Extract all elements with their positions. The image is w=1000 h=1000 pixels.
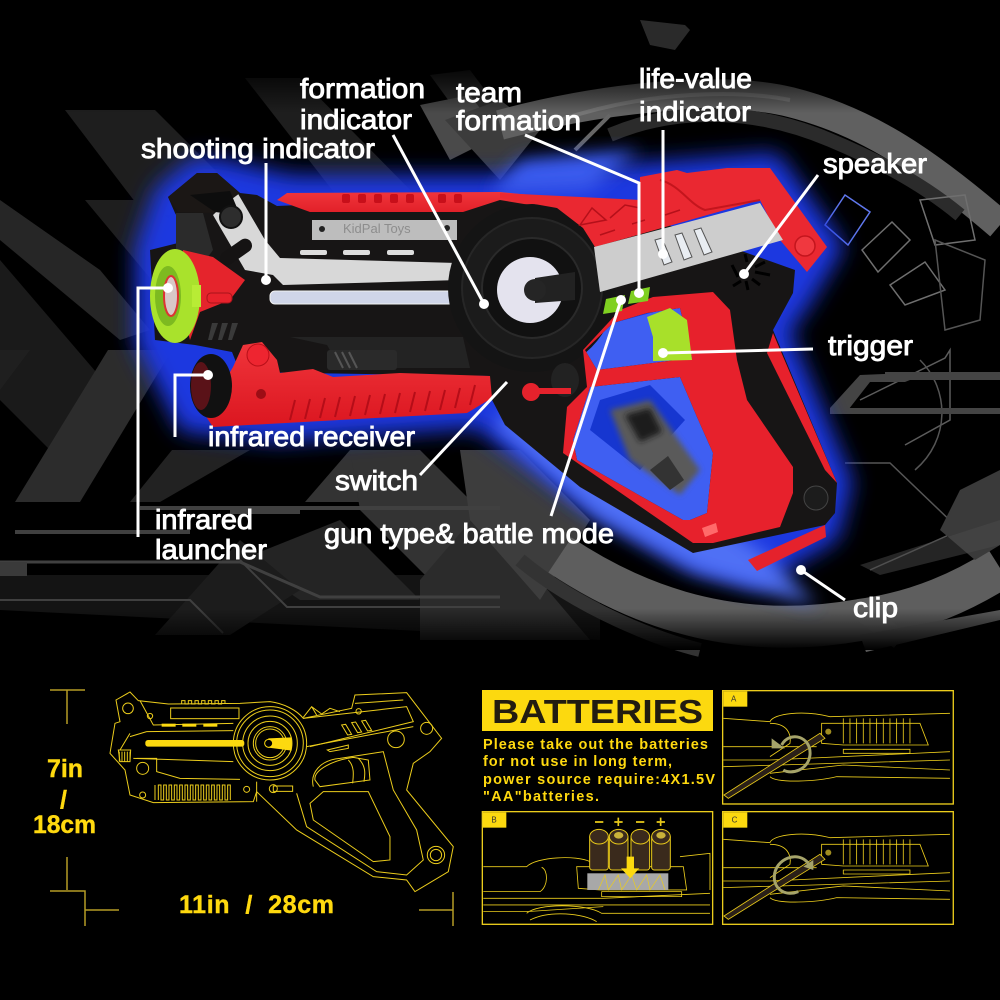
muzzle: [150, 249, 245, 343]
nameplate: [312, 220, 457, 240]
panel B: [482, 812, 713, 924]
red top rail: [277, 192, 590, 222]
width label: 11in / 28cm: [179, 891, 334, 919]
batteries instructions: "AA"batteries.: [483, 789, 599, 805]
height label: /: [60, 786, 67, 814]
green indicators: [603, 287, 650, 314]
dimension drawing: yellow gun outline: [110, 692, 453, 892]
laser gun product: [150, 168, 837, 571]
panel C: C: [732, 816, 738, 825]
infrared receiver barrel: [190, 342, 492, 427]
turret ring: [448, 204, 616, 372]
label: switch: switch: [335, 465, 418, 496]
light bar: [270, 291, 477, 304]
silver rear panel: [594, 203, 783, 292]
batteries heading: BATTERIES: [492, 693, 703, 730]
circuit lines: [0, 508, 500, 633]
batteries instructions: for not use in long term,: [483, 754, 672, 770]
vents: [208, 323, 238, 340]
leader lines: [138, 130, 845, 600]
panel B: B: [491, 816, 497, 825]
label: infrared receiver: infrared receiver: [208, 421, 415, 452]
left chevrons: [0, 78, 600, 640]
clip: [748, 525, 826, 571]
blue glow behind gun: [150, 150, 837, 590]
label: formation indicator: formation: [300, 73, 425, 104]
panel A: A: [731, 695, 737, 704]
centre triangles: [155, 450, 590, 640]
gun body silhouette: [150, 173, 837, 553]
label: team formation: team: [456, 77, 522, 108]
label: gun type and battle mode: gun type& battle mode: [324, 518, 614, 549]
label: formation indicator: indicator: [300, 104, 412, 135]
panel C: [723, 812, 953, 924]
background: tech chevrons and rings: [0, 20, 1000, 652]
dimension lines: [50, 690, 453, 926]
light blue inside trigger guard: [585, 305, 695, 372]
label: team formation: formation: [456, 105, 581, 136]
grip screw: [804, 486, 828, 510]
mode lever: [522, 363, 579, 401]
large ring arcs: [500, 94, 1000, 650]
red rear strip: [767, 333, 837, 483]
sight: [168, 173, 255, 268]
label: life-value indicator: indicator: [639, 96, 751, 127]
height label: 18cm: [33, 811, 96, 839]
right wireframe: [825, 195, 985, 570]
label: clip: clip: [853, 592, 898, 623]
label: shooting indicator: shooting indicator: [141, 133, 375, 164]
upper mosaic: [420, 20, 690, 180]
label: infrared launcher: infrared: [155, 504, 253, 535]
trigger: [647, 308, 692, 361]
batteries instructions: power source require:4X1.5V: [483, 772, 715, 788]
batteries instructions: Please take out the batteries: [483, 737, 708, 753]
speaker grille: [732, 254, 770, 290]
red upper band and rear block: [500, 168, 827, 272]
panel A: [723, 691, 953, 804]
slider: [290, 337, 470, 370]
silver front panel: [213, 192, 460, 285]
height label: 7in: [47, 755, 83, 783]
label: infrared launcher: launcher: [155, 534, 267, 565]
nameplate: KidPal Toys: [343, 221, 411, 236]
red handle and guard: [563, 292, 793, 543]
label: speaker: speaker: [823, 148, 927, 179]
label: trigger: trigger: [828, 330, 913, 361]
label: life-value indicator: life-value: [639, 63, 752, 94]
